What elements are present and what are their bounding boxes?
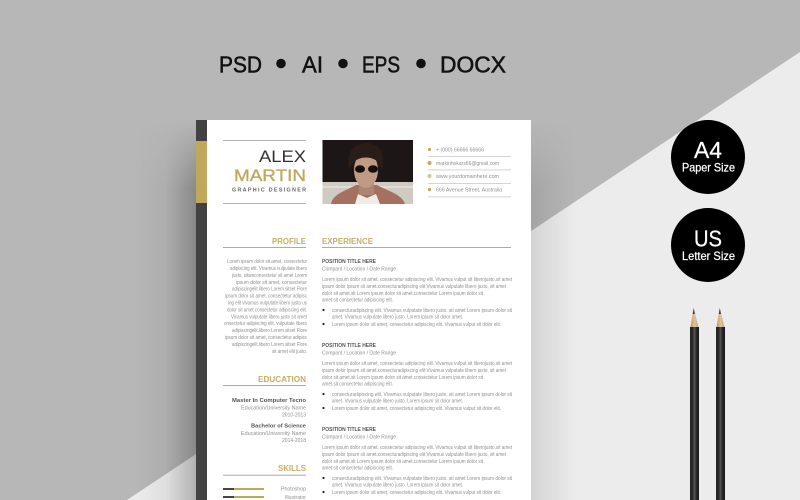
badge: US letter size <box>671 208 745 282</box>
panel: profile: justo. sitamconsectetur sit amet Lorem <box>231 273 307 279</box>
sidebar stripe <box>196 120 207 500</box>
panel: profile: PROFILE <box>272 237 307 246</box>
icon: left pencil <box>690 308 699 500</box>
job entry 1: ipsum dolor ipsum sit amet.consecturadipiscing elit Vivamus vulputate libero justo, sit amet <box>322 284 506 290</box>
job entry 3 <box>322 427 512 496</box>
job entry 2: ipsum dolor ipsum sit amet.consecturadipiscing elit Vivamus vulputate libero justo, sit amet <box>322 368 506 374</box>
job entry 3: amet. Vivamus vulputate libero justo. Lorem ipsum sit dolor amet. <box>332 482 463 488</box>
job entry 1: Lorem ipsum dolor sit amet, consectetur adipiscing elit. Vivamus vulput sit liberojusto.sit amet <box>322 277 512 283</box>
job entry 1: Compant / Location / Date Range <box>322 266 396 272</box>
job entry 1: POSITION TITLE HERE <box>322 259 377 265</box>
job entry 2: POSITION TITLE HERE <box>322 343 377 349</box>
panel: profile: Lorem ipsum dolor sit amet, consectetur <box>227 259 307 265</box>
job entry 3: ipsum dolor ipsum sit amet.consecturadipiscing elit Vivamus vulputate libero justo, sit amet <box>322 452 506 458</box>
contact list <box>428 147 511 197</box>
icon: mail <box>428 161 432 165</box>
name block: GRAPHIC DESIGNER <box>232 187 306 193</box>
skill bar: Photoshop: Photoshop <box>281 486 306 492</box>
resume template promo infographic <box>127 52 800 500</box>
panel: education: EDUCATION <box>258 375 306 384</box>
panel: profile: ing elit vivamus vulputate libero justo us <box>228 300 307 306</box>
job entry 3: Compant / Location / Date Range <box>322 434 396 440</box>
job entry 2 <box>322 343 512 412</box>
panel: education: Education/University Name <box>241 406 306 412</box>
badge: A4 paper size <box>671 120 745 194</box>
heading: file formats: EPS <box>362 52 400 78</box>
contact: email: markinhokars66@gmail.com <box>436 161 499 167</box>
badge: A4 paper size: Paper Size <box>682 160 735 174</box>
panel: profile: ipsum dolor sit amet, consectetur adipisc <box>225 294 307 300</box>
icon: location pin <box>428 188 431 191</box>
badge: US letter size: Letter Size <box>682 249 735 263</box>
panel: education: Master In Computer Tecno <box>232 398 306 404</box>
paper shadow <box>156 132 561 500</box>
panel: profile: ipsum dolor sit amet, consectetur <box>236 280 307 286</box>
panel: profile <box>223 237 307 355</box>
panel: profile: adipiscing elit. Vivamus vulputate libero <box>230 266 307 272</box>
icon: phone <box>428 148 431 151</box>
badge: US letter size: US <box>694 226 722 252</box>
job entry 3: Lorem ipsum dolor sit amet, consectetur adipiscing elit. Vivamus vulput sit liberojusto.sit amet <box>322 445 512 451</box>
contact: address: 666 Avenue Street, Australia <box>436 187 502 193</box>
badge: A4 paper size: A4 <box>694 137 722 163</box>
job entry 3: POSITION TITLE HERE <box>322 427 377 433</box>
panel: education: 2010-2013 <box>282 412 306 418</box>
heading: file formats <box>219 52 506 78</box>
job entry 1: consecturadipiscing elit. Vivamus vulputate libero justo. sit amet Lorem ipsum dolor sit <box>332 308 512 314</box>
resume sheet <box>196 120 531 500</box>
job entry 2: Lorem ipsum dolor sit amet, consectetur adipiscing elit. Vivamus vulput sit liberojusto.sit amet <box>322 361 512 367</box>
panel: profile: adipiscingelit.libero Lorem sitset Flore <box>232 287 307 293</box>
panel: education: Education/University Name <box>241 431 306 437</box>
job entry 1: amet. Vivamus vulputate libero justo. Lorem ipsum sit dolor amet. <box>332 314 463 320</box>
panel: profile: onsectetur adipiscing elit. vulputate libero <box>224 321 307 327</box>
job entry 2: Compant / Location / Date Range <box>322 350 396 356</box>
job entry 3: Lorem ipsum dolor sit amet, consectetur adipiscing elit. Vivamus vulput sit dolor elit. <box>332 490 501 496</box>
icon: right pencil <box>716 308 725 500</box>
panel: skills <box>223 464 307 500</box>
panel: experience: EXPERIENCE <box>322 237 374 246</box>
name block: ALEX <box>259 148 306 166</box>
icon: globe <box>428 174 432 178</box>
job entry 1: dolor sit amet.sit Lorem ipsum dolor sit amet.consectetur Lorem ipsum dolor sit <box>322 291 483 297</box>
name block <box>223 140 306 204</box>
job entry 2: Lorem ipsum dolor sit amet, consectetur adipiscing elit. Vivamus vulput sit dolor elit. <box>332 406 501 412</box>
panel: profile: adipiscingelit.libero Lorem sitset Flore <box>232 342 307 348</box>
panel: skills: SKILLS <box>278 464 307 473</box>
job entry 1: Lorem ipsum dolor sit amet, consectetur adipiscing elit. Vivamus vulput sit dolor elit. <box>332 322 501 328</box>
panel: education: 2014-2018 <box>282 438 306 444</box>
name block: MARTIN <box>234 167 306 185</box>
panel: education <box>223 375 307 444</box>
heading: file formats: DOCX <box>440 52 506 78</box>
job entry 3: amet.sit consectetur adipiscing elit. <box>322 466 393 472</box>
job entry 2: amet. Vivamus vulputate libero justo. Lorem ipsum sit dolor amet. <box>332 398 463 404</box>
contact: phone: + (000) 66666 66666 <box>436 147 484 153</box>
job entry 1: amet.sit consectetur adipiscing elit. <box>322 298 393 304</box>
job entry 3: consecturadipiscing elit. Vivamus vulputate libero justo. sit amet Lorem ipsum dolor sit <box>332 476 512 482</box>
panel: profile: Vivamus vulputate libero justo sit amet <box>231 314 307 320</box>
panel: profile: adipiscingelit.libero Lorem sitset Flore <box>232 328 307 334</box>
job entry 1 <box>322 259 512 328</box>
panel: education: Bachelor of Science <box>251 424 307 430</box>
profile photo <box>322 140 413 204</box>
job entry 2: dolor sit amet.sit Lorem ipsum dolor sit amet.consectetur Lorem ipsum dolor sit <box>322 375 483 381</box>
panel: experience <box>322 237 512 496</box>
panel: profile: sit amet elit justo. <box>272 349 307 355</box>
panel: profile: dolor sit amet consectetur adipiscing elit. <box>227 307 307 313</box>
job entry 2: amet.sit consectetur adipiscing elit. <box>322 382 393 388</box>
job entry 2: consecturadipiscing elit. Vivamus vulputate libero justo. sit amet Lorem ipsum dolor sit <box>332 392 512 398</box>
heading: file formats: PSD <box>219 52 262 78</box>
contact: website: www.yourdomainhere.com <box>436 174 499 180</box>
paper <box>196 120 531 500</box>
heading: file formats: AI <box>302 52 323 78</box>
job entry 3: dolor sit amet.sit Lorem ipsum dolor sit amet.consectetur Lorem ipsum dolor sit <box>322 459 483 465</box>
panel: profile: ipsum dolor sit amet, consectetur adipisc <box>225 335 307 341</box>
